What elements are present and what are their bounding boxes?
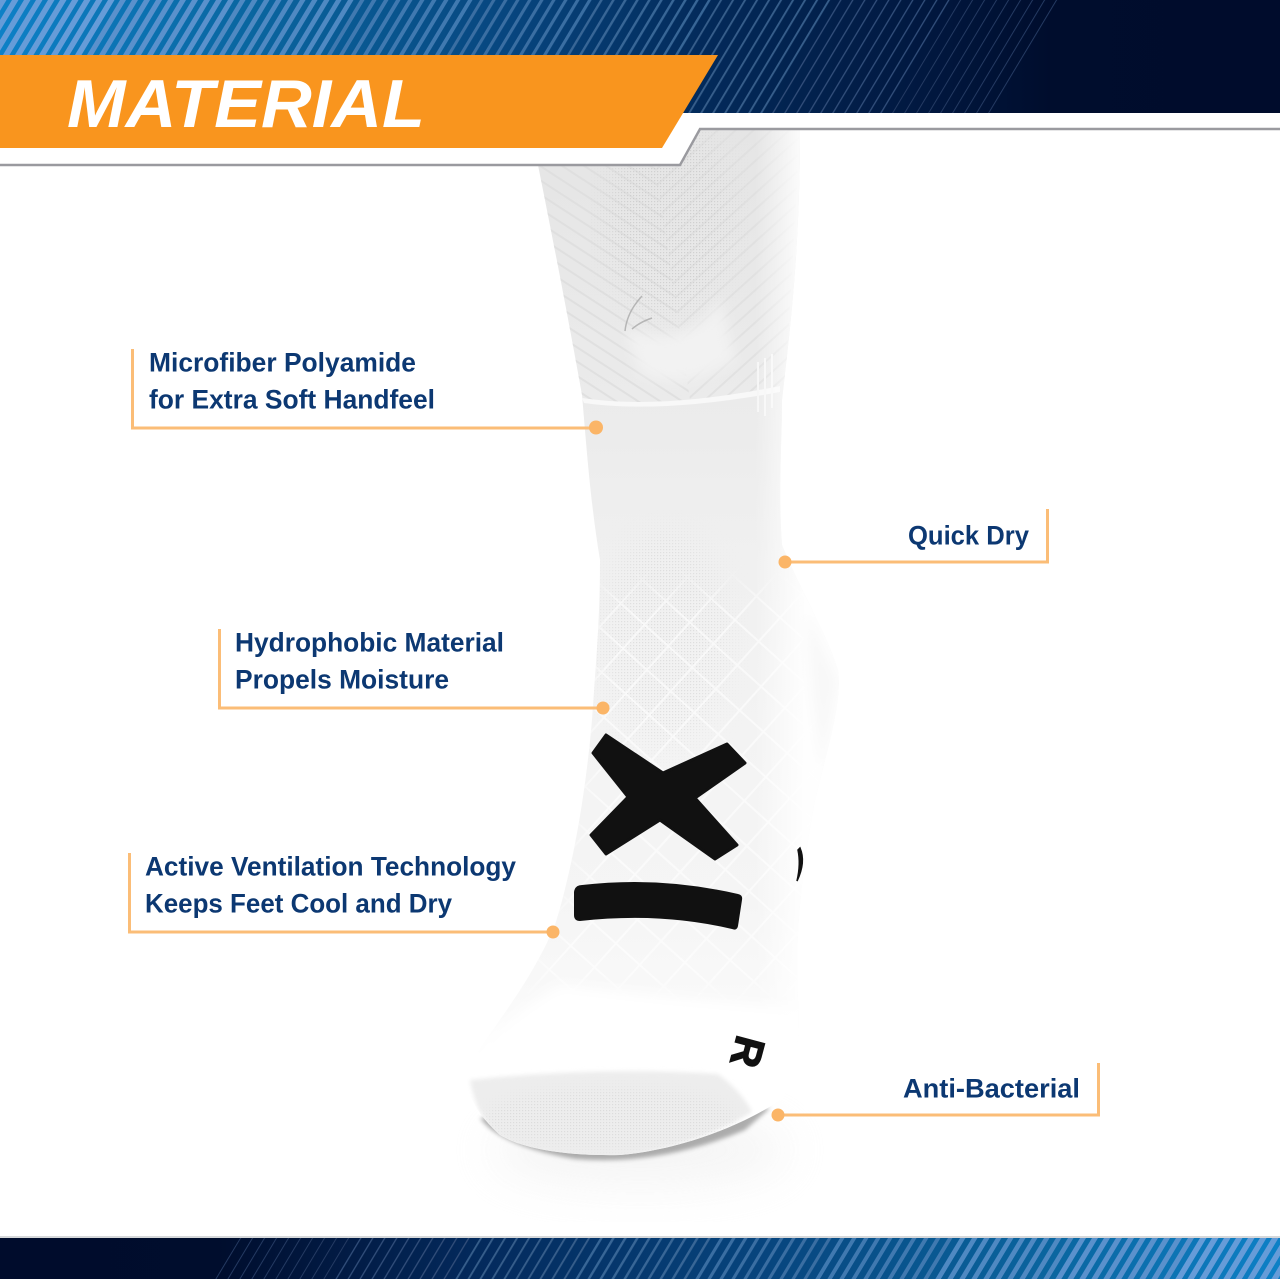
top banner: [0, 0, 1280, 165]
callout: anti-bacterial: Anti-Bacterial: [903, 1074, 1080, 1104]
callout: hydrophobic material: Propels Moisture: [235, 664, 449, 694]
white band: [0, 113, 1280, 164]
callout: hydrophobic material: Hydrophobic Material: [235, 628, 504, 658]
side mark: [797, 848, 802, 881]
callout: quick dry: Quick Dry: [908, 520, 1029, 550]
title: MATERIAL: [67, 66, 425, 142]
callout: microfiber polyamide: [132, 348, 603, 434]
heel pad: [806, 612, 838, 770]
callout: active ventilation: Keeps Feet Cool and Dry: [145, 888, 452, 918]
ribs: [758, 354, 772, 416]
sock photo: [470, 130, 804, 1168]
callout: microfiber polyamide: for Extra Soft Handfeel: [149, 384, 435, 414]
fold mark: [625, 296, 652, 331]
callout: active ventilation: Active Ventilation Technology: [145, 852, 516, 882]
black X mark: [591, 735, 745, 859]
contact shadow: [480, 1100, 770, 1160]
callout: microfiber polyamide: Microfiber Polyamide: [149, 348, 416, 378]
cuff seam: [582, 386, 780, 407]
black bar mark: [574, 882, 742, 930]
callout: anti-bacterial: [772, 1063, 1098, 1122]
toe cap: [470, 1071, 752, 1158]
floor glow: [490, 1114, 790, 1186]
bottom banner: [0, 1236, 1280, 1279]
toe highlight band: [455, 985, 810, 1100]
title tab: [0, 55, 718, 148]
logo mark: R: [721, 1031, 774, 1073]
soft light area: [629, 309, 732, 382]
callout: quick dry: [778, 509, 1048, 568]
callout: active ventilation: [130, 852, 560, 938]
callout: hydrophobic material: [220, 628, 610, 714]
